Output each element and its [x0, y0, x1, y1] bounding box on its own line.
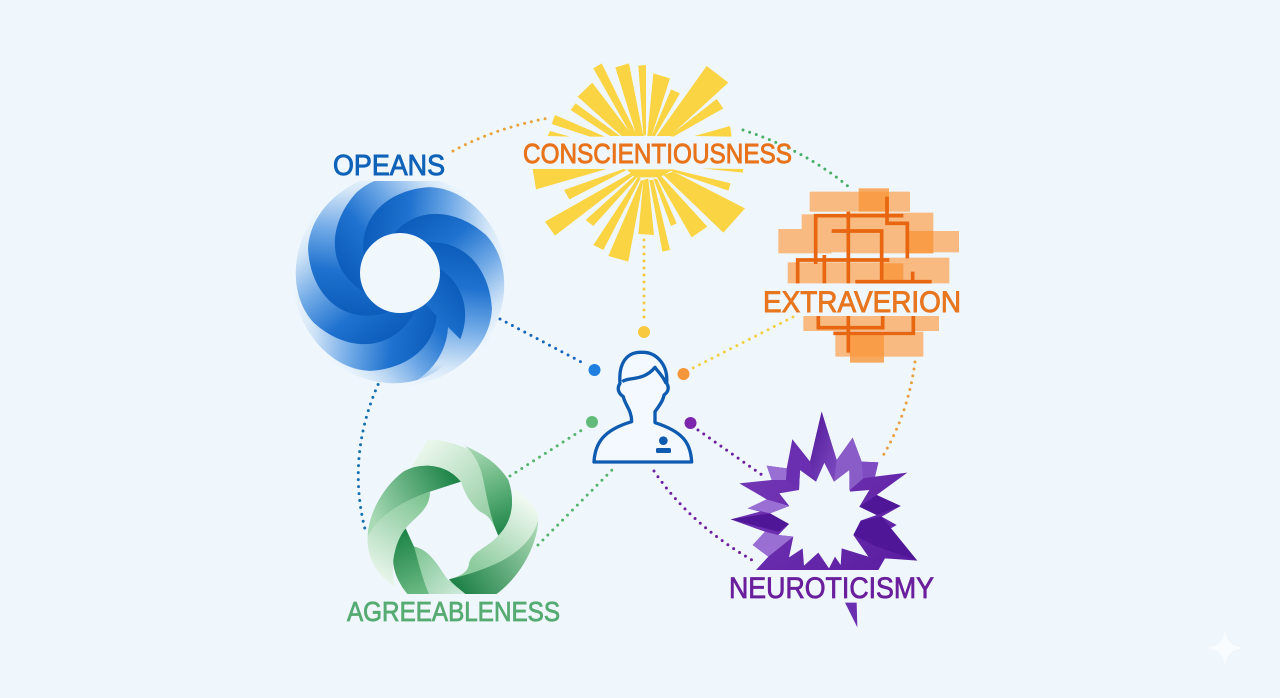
icon: yellow sunburst [533, 63, 745, 262]
central person icon [594, 352, 692, 462]
panel: Openness swirl [296, 154, 504, 384]
node dots [586, 326, 696, 429]
icon: sparkle watermark [1207, 630, 1243, 666]
label: CONSCIENTIOUSNESS: CONSCIENTIOUSNESS [523, 138, 792, 169]
icon: purple spiky star [731, 412, 917, 627]
icon: orange overlapping blocks [778, 188, 959, 363]
panel: Neuroticism star [729, 412, 934, 627]
label: OPEANS: OPEANS [333, 150, 445, 182]
infographic canvas [296, 63, 1241, 664]
label: AGREEABLENESS: AGREEABLENESS [347, 596, 560, 627]
label: EXTRAVERION: EXTRAVERION [763, 286, 961, 319]
panel: Agreeableness ribbon [347, 439, 560, 627]
label: NEUROTICISMY: NEUROTICISMY [729, 572, 934, 605]
panel: Conscientiousness sunburst [523, 63, 792, 262]
connector lines [358, 118, 915, 563]
icon: green ribbon ring [368, 439, 539, 595]
icon: blue swirl [296, 181, 504, 384]
panel: Extraversion blocks [763, 188, 961, 363]
